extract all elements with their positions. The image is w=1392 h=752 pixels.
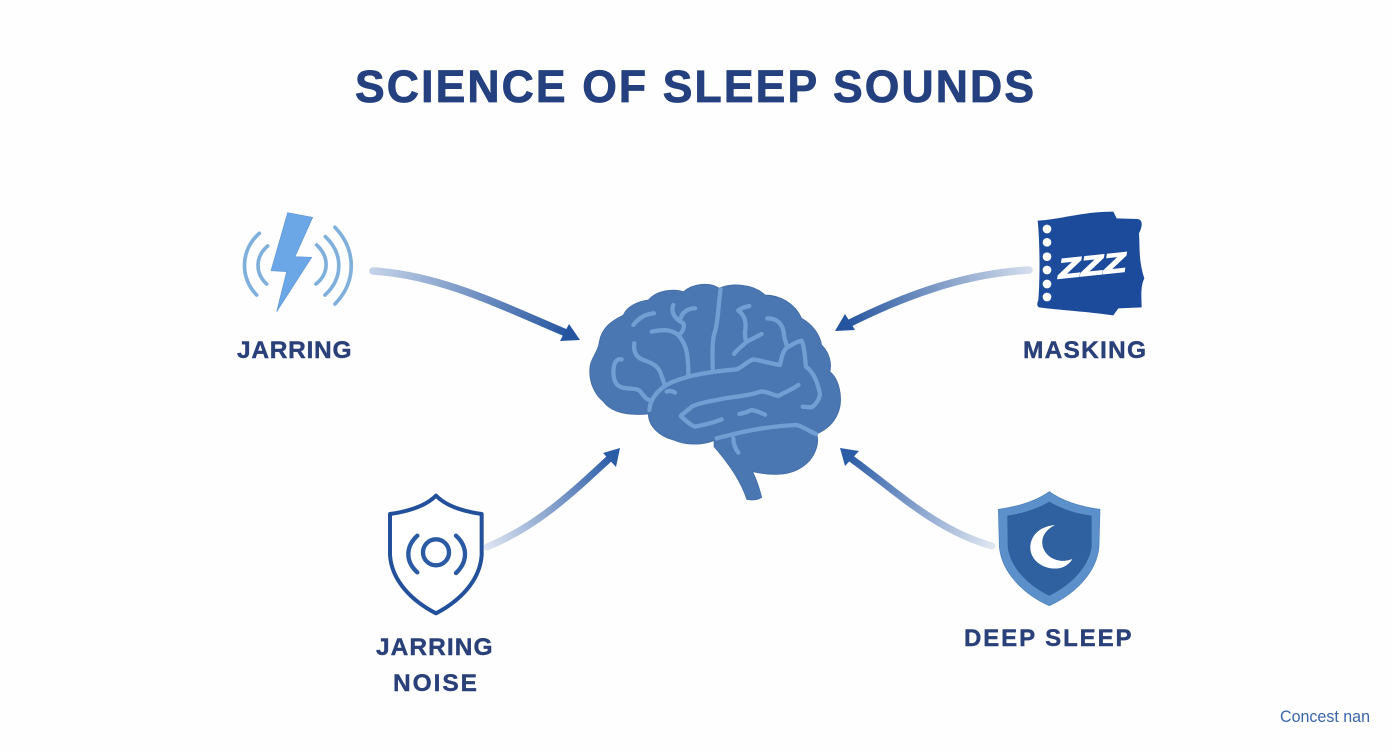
icon: zzz notepad: ZZZ	[1055, 246, 1129, 284]
label: jarring noise	[376, 634, 492, 697]
label: masking: MASKING	[1023, 337, 1146, 364]
label: jarring noise: JARRING	[376, 634, 492, 661]
footer note: Concest nan	[1280, 708, 1370, 726]
label: jarring noise: NOISE	[393, 670, 477, 697]
title: SCIENCE OF SLEEP SOUNDS	[355, 60, 1034, 112]
icon: lightning bolt with sound waves	[244, 213, 351, 312]
icon: outlined shield with sound	[390, 496, 482, 613]
arrow: jarring to brain	[373, 271, 580, 341]
arrow: deep sleep to brain	[840, 448, 992, 546]
arrow: jarring noise to brain	[487, 448, 620, 547]
label: deep sleep: DEEP SLEEP	[964, 625, 1132, 652]
arrow: masking to brain	[835, 270, 1029, 331]
icon: moon shield	[998, 492, 1100, 606]
icon: zzz notepad	[1037, 212, 1144, 315]
icon: brain	[590, 284, 841, 500]
label: jarring: JARRING	[237, 337, 352, 364]
